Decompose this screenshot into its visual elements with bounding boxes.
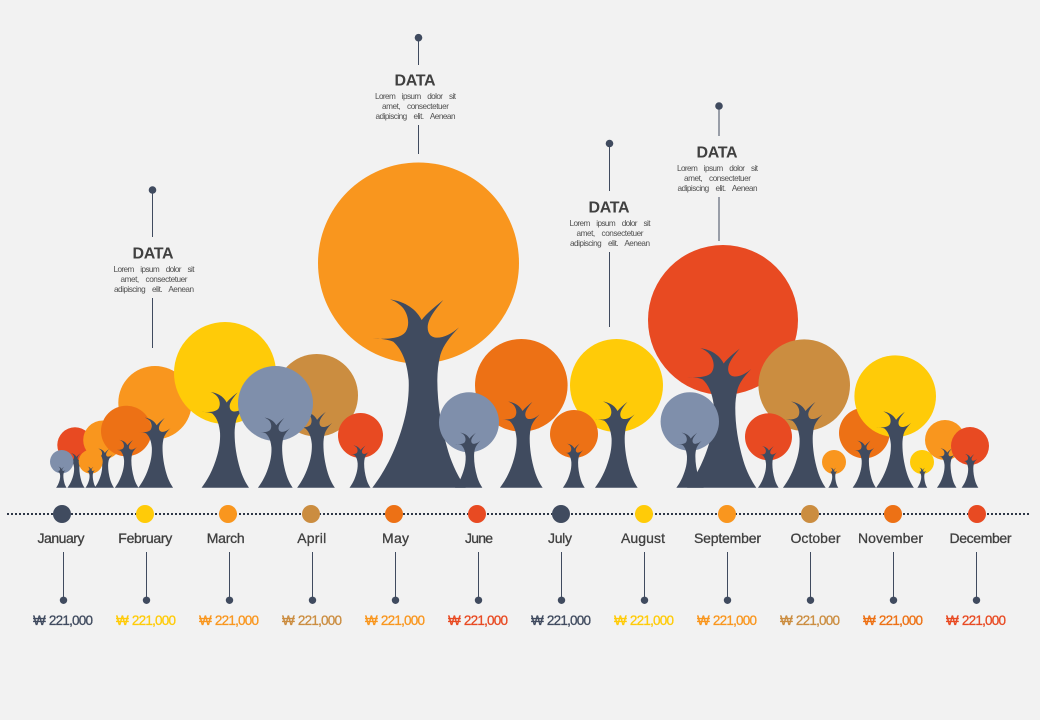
tree: gray right bbox=[661, 392, 719, 488]
callout: centre-right DATA: DATA bbox=[588, 200, 630, 216]
tree: red right bbox=[745, 413, 792, 488]
tree: tan left bbox=[275, 354, 358, 488]
month: November bbox=[858, 505, 923, 628]
month: July: July bbox=[548, 530, 572, 546]
tree: orange far right bbox=[925, 420, 965, 488]
tree: tiny yellow right bbox=[910, 450, 934, 488]
tree: yellow left bbox=[174, 322, 276, 488]
tree: yellow right bbox=[854, 355, 936, 488]
month: August bbox=[614, 505, 674, 628]
month: September: ₩ 221,000 bbox=[697, 613, 757, 628]
month: February: ₩ 221,000 bbox=[116, 613, 176, 628]
tree: tiny orange right bbox=[822, 450, 846, 488]
month: May: ₩ 221,000 bbox=[365, 613, 425, 628]
callout: tallest DATA: amet, consectetuer bbox=[382, 102, 449, 111]
month: January: January bbox=[38, 530, 84, 546]
callout: right DATA bbox=[677, 102, 759, 241]
month: June bbox=[448, 505, 508, 628]
callout: left DATA: DATA bbox=[132, 246, 174, 262]
callout: right DATA: Lorem ipsum dolor sit bbox=[677, 164, 759, 173]
month: December bbox=[946, 505, 1012, 628]
month: April: ₩ 221,000 bbox=[282, 613, 342, 628]
month: September bbox=[694, 505, 761, 628]
tree: tiny gray far left bbox=[50, 450, 73, 488]
month: October: ₩ 221,000 bbox=[780, 613, 840, 628]
callout: left DATA bbox=[114, 186, 195, 348]
month: November: November bbox=[858, 530, 923, 546]
month: August: ₩ 221,000 bbox=[614, 613, 674, 628]
callout: right DATA: amet, consectetuer bbox=[684, 174, 751, 183]
callout: left DATA: adipiscing elit. Aenean bbox=[114, 285, 194, 294]
month: July bbox=[531, 505, 591, 628]
month: February: February bbox=[118, 530, 172, 546]
tree: dark orange centre bbox=[475, 339, 568, 488]
tree: yellow centre bbox=[570, 339, 663, 488]
tree: dark orange left bbox=[101, 406, 152, 488]
month: February bbox=[116, 505, 176, 628]
month: March: ₩ 221,000 bbox=[199, 613, 259, 628]
month: September: September bbox=[694, 530, 761, 546]
tree: red far right bbox=[951, 427, 989, 488]
tree: large red bbox=[648, 245, 798, 488]
callout: right DATA: adipiscing elit. Aenean bbox=[678, 184, 758, 193]
tree: dark orange right bbox=[839, 408, 890, 488]
month: March: March bbox=[207, 530, 245, 546]
callout: left DATA: amet, consectetuer bbox=[120, 275, 188, 284]
tree: tiny orange far left bbox=[79, 450, 103, 488]
month: March bbox=[199, 505, 259, 628]
callout: centre-right DATA: amet, consectetuer bbox=[576, 229, 644, 238]
month: June: June bbox=[465, 530, 493, 546]
month: August: August bbox=[621, 530, 665, 546]
tree trunk: orange left bbox=[138, 418, 173, 488]
forest of trees bbox=[50, 162, 989, 488]
tree: red beside big tree bbox=[338, 413, 383, 488]
month: June: ₩ 221,000 bbox=[448, 613, 508, 628]
month: April bbox=[282, 505, 342, 628]
month: April: April bbox=[297, 530, 326, 546]
month: October bbox=[780, 505, 841, 628]
tree: dark orange small centre bbox=[550, 410, 598, 488]
callout: centre-right DATA bbox=[570, 140, 651, 327]
month: October: October bbox=[790, 530, 841, 546]
timeline dotted axis bbox=[7, 513, 1030, 515]
tree: large orange bbox=[318, 162, 519, 488]
callout: centre-right DATA: adipiscing elit. Aenean bbox=[570, 239, 650, 248]
month: December: ₩ 221,000 bbox=[946, 613, 1006, 628]
tree: tan right bbox=[758, 339, 850, 488]
callout: right DATA: DATA bbox=[696, 144, 738, 162]
month: May: May bbox=[382, 530, 409, 546]
tree: orange small far left bbox=[83, 420, 122, 488]
callout: tallest DATA bbox=[375, 34, 457, 154]
tree: gray left bbox=[238, 366, 313, 488]
tree: red small far left bbox=[57, 427, 93, 488]
month: November: ₩ 221,000 bbox=[863, 613, 923, 628]
month: December: December bbox=[950, 530, 1012, 546]
month: May bbox=[365, 505, 425, 628]
month: January bbox=[33, 505, 93, 628]
month: January: ₩ 221,000 bbox=[33, 613, 93, 628]
tree crown: orange left bbox=[118, 366, 192, 439]
callout: centre-right DATA: Lorem ipsum dolor sit bbox=[570, 219, 651, 228]
tree: gray centre bbox=[439, 392, 499, 488]
callout: tallest DATA: DATA bbox=[394, 72, 436, 90]
callout: tallest DATA: adipiscing elit. Aenean bbox=[376, 112, 456, 121]
callout: left DATA: Lorem ipsum dolor sit bbox=[114, 265, 195, 274]
month: July: ₩ 221,000 bbox=[531, 613, 591, 628]
callout: tallest DATA: Lorem ipsum dolor sit bbox=[375, 92, 457, 101]
